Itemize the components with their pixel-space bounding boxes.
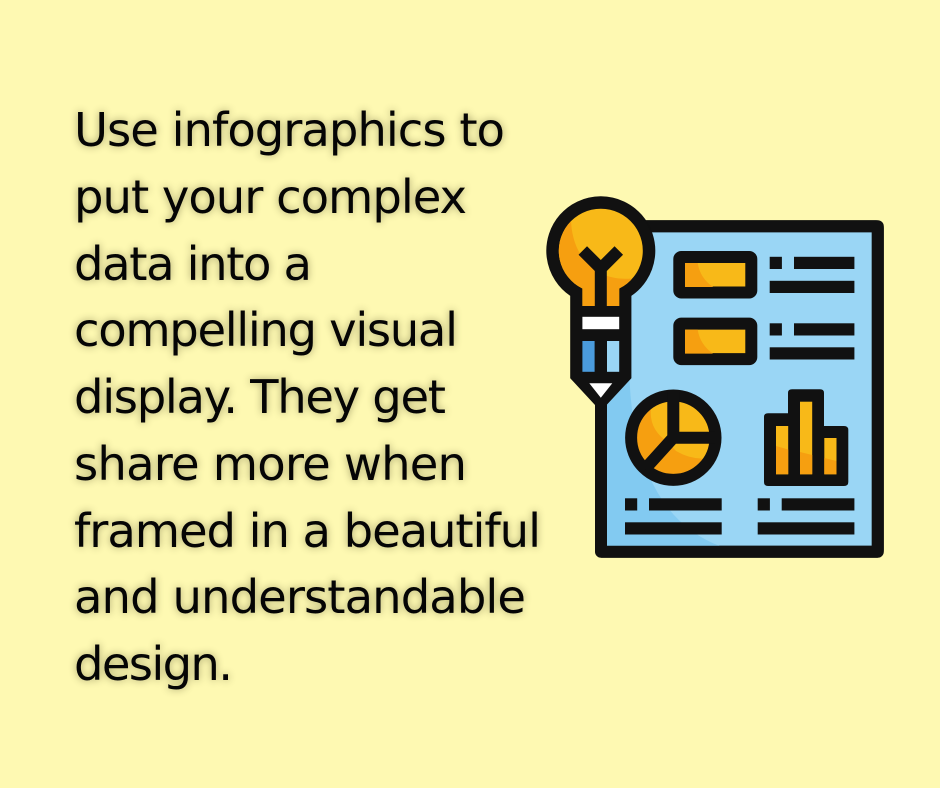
light bulb pencil (547, 197, 655, 410)
text block: body copy: display. They get (74, 370, 446, 424)
text block: body copy: data into a (74, 237, 312, 291)
text lines upper 1 (770, 257, 854, 293)
bar chart (764, 389, 848, 486)
icon: report document with light bulb pencil (547, 197, 878, 552)
text block: body copy: put your complex (74, 170, 467, 224)
text lines lower left (625, 498, 722, 534)
text block: body copy: framed in a beautiful (74, 504, 541, 558)
document sheet (601, 226, 878, 552)
text block: body copy: compelling visual (74, 303, 458, 357)
upper box 2 (679, 324, 751, 359)
text block: body copy: Use infographics to (74, 103, 505, 157)
pie chart (630, 392, 716, 490)
text lines lower right (758, 498, 854, 534)
text block: body copy: share more when (74, 437, 467, 491)
text lines upper 2 (770, 323, 854, 360)
text block: body copy (74, 103, 541, 691)
text block: body copy: and understandable (74, 570, 526, 624)
text block: body copy: design. (74, 637, 233, 691)
upper box 1 (679, 257, 751, 292)
